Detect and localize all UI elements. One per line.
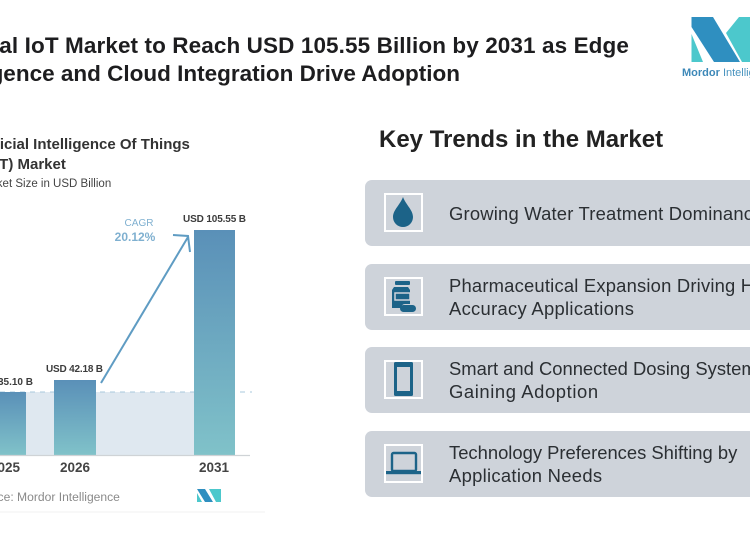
small logo: [197, 489, 221, 502]
year labels: [0, 460, 230, 475]
logo: Mordor Intelligence: [682, 17, 750, 79]
icon: laptop: [384, 444, 423, 483]
bar 2025: [0, 392, 26, 455]
card text: Gaining Adoption: [449, 381, 599, 402]
axis: [0, 454, 250, 456]
card: smart dosing: [365, 347, 750, 413]
icon: water drop: [384, 193, 423, 232]
year labels: 2026: [60, 460, 91, 475]
value labels: USD 105.55 B: [183, 214, 246, 225]
CAGR arrow: [101, 235, 190, 383]
CAGR label: [115, 218, 156, 244]
card text: [449, 358, 750, 402]
value labels: [0, 214, 246, 388]
card: pharmaceutical: [365, 264, 750, 330]
icon: medicine bottle: [384, 277, 423, 316]
card text: [449, 275, 750, 319]
bar 2026: [54, 380, 96, 455]
title: [0, 33, 629, 86]
card text: [449, 442, 738, 486]
baseline dashed line: [0, 391, 252, 393]
CAGR label: CAGR: [125, 218, 153, 229]
chart: market size panel: [0, 136, 265, 512]
forecast band: [0, 392, 194, 455]
chart title: [0, 136, 190, 190]
card: water treatment: [365, 180, 750, 246]
CAGR label: 20.12%: [115, 230, 156, 244]
card text: Application Needs: [449, 465, 602, 486]
card text: Technology Preferences Shifting by: [449, 442, 737, 463]
bar 2031: [194, 230, 235, 455]
value labels: USD 42.18 B: [46, 364, 103, 375]
heading: key trends: Key Trends in the Market: [379, 126, 663, 153]
icon: smartphone: [384, 360, 423, 399]
card text: Accuracy Applications: [449, 298, 634, 319]
card: technology preferences: [365, 431, 750, 497]
year labels: 2031: [199, 460, 230, 475]
